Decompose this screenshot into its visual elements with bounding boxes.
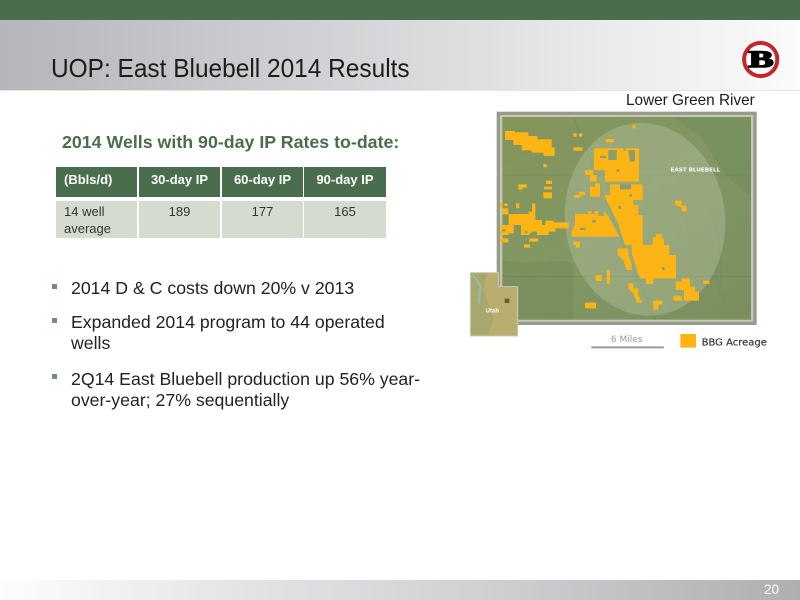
icon: company logo: B	[748, 46, 773, 72]
table: IP rates: 90-day IP	[316, 172, 374, 187]
top green bar	[0, 0, 800, 20]
lighter play ellipse	[554, 114, 736, 325]
table: IP rates: (Bbls/d)	[64, 172, 112, 187]
BBG acreage parcels	[500, 125, 709, 310]
bullet list: Expanded 2014 program to 44 operated	[71, 312, 385, 332]
table: IP rates: 177	[252, 204, 273, 219]
table: IP rates: 14 well	[64, 204, 104, 219]
scale bar	[592, 335, 663, 347]
table: IP rates: 60-day IP	[234, 172, 291, 187]
bullet list: over-year; 27% sequentially	[71, 390, 289, 410]
legend: BBG Acreage	[702, 338, 767, 349]
table: IP rates: 165	[334, 204, 356, 219]
bullet list: 2Q14 East Bluebell production up 56% year-	[71, 369, 420, 389]
table: IP rates: average	[64, 221, 111, 236]
table heading: 2014 Wells with 90-day IP Rates to-date:	[62, 132, 399, 152]
inset map: Utah: Utah	[486, 308, 499, 314]
title: UOP: East Bluebell 2014 Results	[51, 53, 410, 83]
bullet list	[52, 278, 420, 410]
footer gradient band	[0, 580, 800, 600]
table: IP rates: 30-day IP	[151, 172, 208, 187]
header gradient band	[0, 20, 800, 91]
bullet list: 2014 D & C costs down 20% v 2013	[71, 278, 354, 298]
page number: 20	[764, 582, 779, 597]
map background	[497, 112, 757, 325]
parcel gaps	[502, 150, 665, 270]
bullet list: wells	[71, 333, 110, 353]
table: IP rates	[56, 167, 386, 238]
table: IP rates: 189	[169, 204, 190, 219]
inset map: Utah	[470, 273, 518, 336]
legend	[680, 334, 767, 349]
scale bar: 6 Miles	[611, 335, 643, 345]
icon: company logo	[742, 40, 780, 78]
map caption: Lower Green River	[626, 92, 755, 109]
map label: East Bluebell: EAST BLUEBELL	[670, 167, 721, 173]
